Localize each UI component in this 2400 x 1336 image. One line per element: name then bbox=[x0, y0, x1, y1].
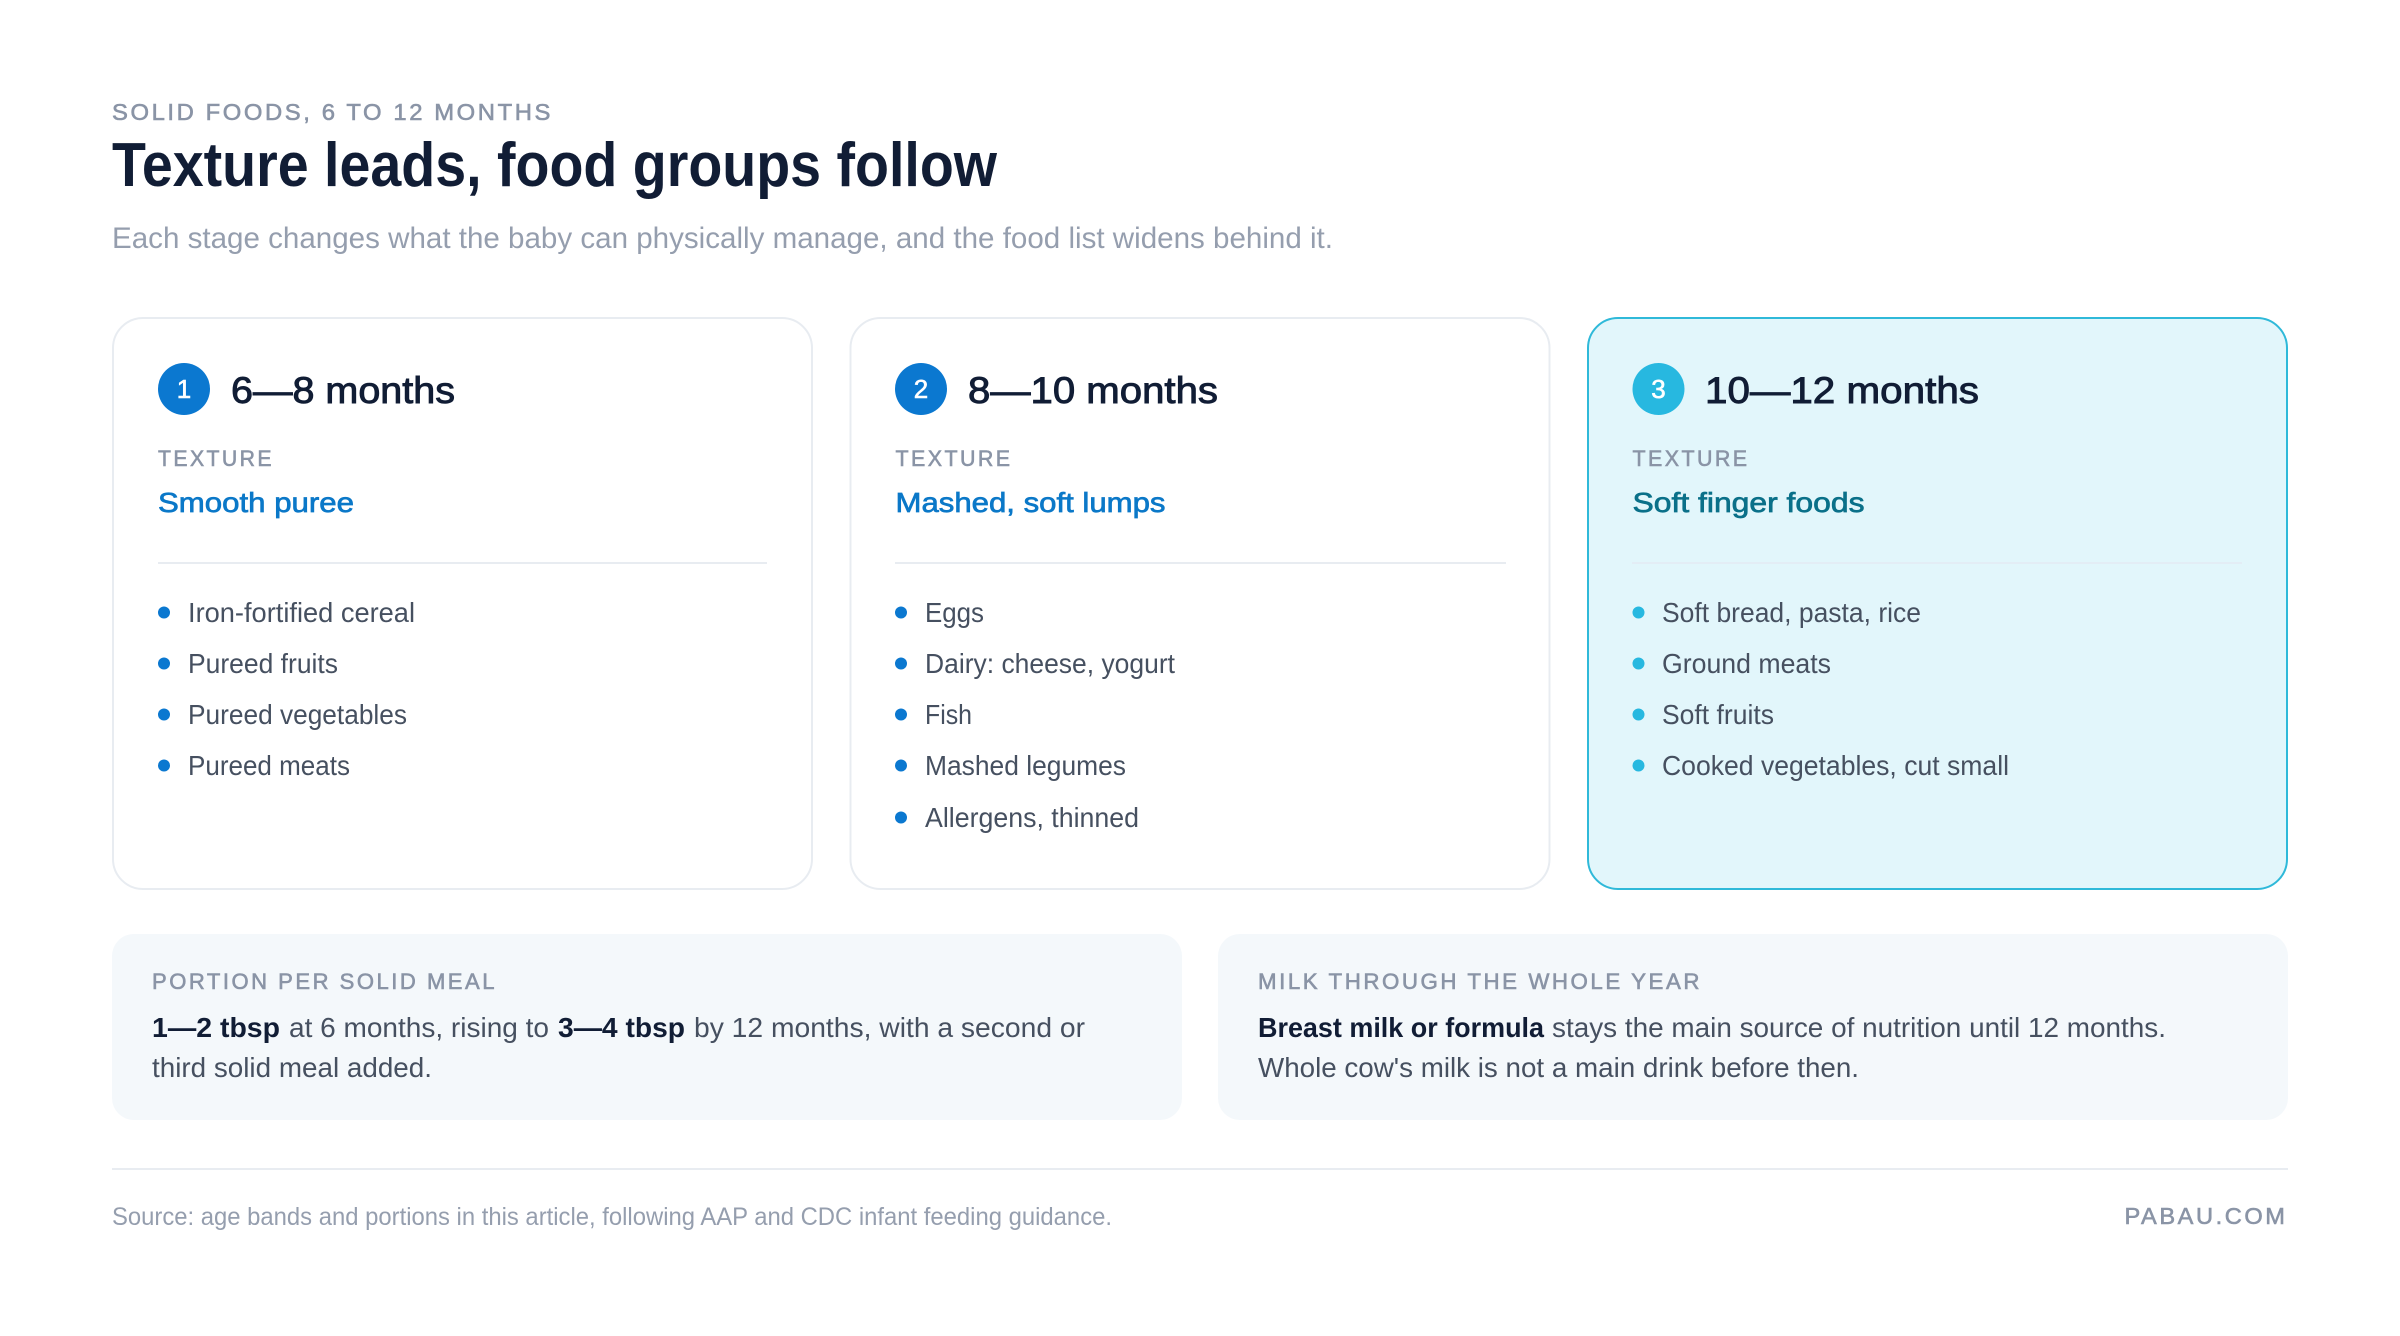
texture value: Smooth puree bbox=[158, 487, 354, 518]
portion text bbox=[152, 1012, 1085, 1083]
source note: Source: age bands and portions in this article, following AAP and CDC infant feeding guidance. bbox=[112, 1203, 1112, 1231]
texture value: Soft finger foods bbox=[1632, 487, 1864, 518]
texture value: Mashed, soft lumps bbox=[896, 487, 1166, 518]
milk text bbox=[1258, 1012, 2166, 1083]
eyebrow: SOLID FOODS, 6 TO 12 MONTHS bbox=[112, 99, 553, 125]
food list: Cooked vegetables, cut small bbox=[1662, 750, 2009, 781]
food list: Soft fruits bbox=[1662, 699, 1774, 730]
panel label: PORTION PER SOLID MEAL bbox=[152, 969, 497, 994]
panel: milk through the whole year bbox=[1218, 934, 2288, 1120]
texture label: TEXTURE bbox=[158, 446, 274, 471]
food list: Pureed fruits bbox=[188, 648, 338, 679]
food list: Pureed vegetables bbox=[188, 699, 407, 730]
title: Texture leads, food groups follow bbox=[112, 131, 998, 200]
panel: portion per solid meal bbox=[112, 934, 1182, 1120]
milk text: Breast milk or formula bbox=[1258, 1012, 1544, 1043]
subtitle: Each stage changes what the baby can physically manage, and the food list widens behind it. bbox=[112, 222, 1333, 255]
step badge 1: 1 bbox=[177, 374, 191, 404]
portion text: 3—4 tbsp bbox=[558, 1012, 685, 1043]
food list bbox=[158, 597, 415, 781]
panel label: MILK THROUGH THE WHOLE YEAR bbox=[1258, 969, 1702, 994]
portion text: at 6 months, rising to bbox=[289, 1012, 549, 1043]
food list: Eggs bbox=[925, 597, 984, 628]
step badge 3 bbox=[1632, 363, 1684, 415]
food list bbox=[1632, 597, 2009, 781]
panel: 8-10 months bbox=[850, 318, 1550, 889]
food list: Mashed legumes bbox=[925, 750, 1126, 781]
stage heading: 10—12 months bbox=[1705, 370, 1979, 411]
stage heading: 6—8 months bbox=[231, 370, 455, 411]
portion text: 1—2 tbsp bbox=[152, 1012, 280, 1043]
step badge 2: 2 bbox=[914, 374, 928, 404]
portion text: third solid meal added. bbox=[152, 1052, 432, 1083]
step badge 2 bbox=[895, 363, 947, 415]
milk text: Whole cow's milk is not a main drink before then. bbox=[1258, 1052, 1859, 1083]
panel: 10-12 months highlighted bbox=[1588, 318, 2287, 889]
food list: Soft bread, pasta, rice bbox=[1662, 597, 1921, 628]
panel: 6-8 months bbox=[113, 318, 812, 889]
step badge 1 bbox=[158, 363, 210, 415]
texture label: TEXTURE bbox=[896, 446, 1012, 471]
stage heading: 8—10 months bbox=[968, 370, 1218, 411]
food list bbox=[895, 597, 1175, 833]
food list: Pureed meats bbox=[188, 750, 350, 781]
food list: Allergens, thinned bbox=[925, 802, 1139, 833]
portion text: by 12 months, with a second or bbox=[694, 1012, 1085, 1043]
step badge 3: 3 bbox=[1651, 374, 1666, 404]
food list: Fish bbox=[925, 699, 972, 730]
food list: Dairy: cheese, yogurt bbox=[925, 648, 1175, 679]
texture label: TEXTURE bbox=[1632, 446, 1750, 471]
food list: Ground meats bbox=[1662, 648, 1831, 679]
brand: PABAU.COM bbox=[2124, 1203, 2288, 1229]
food list: Iron-fortified cereal bbox=[188, 597, 415, 628]
milk text: stays the main source of nutrition until 12 months. bbox=[1552, 1012, 2166, 1043]
